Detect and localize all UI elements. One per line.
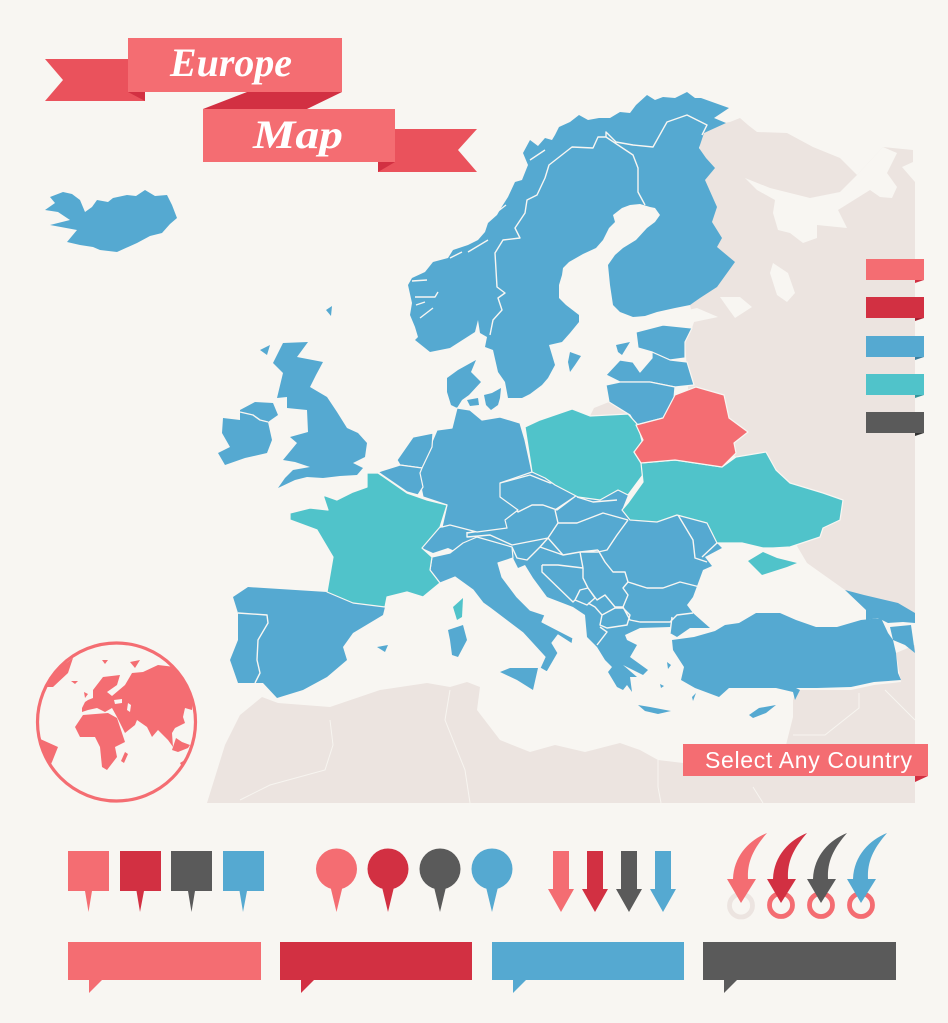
panel: Italy bbox=[430, 537, 573, 690]
panel: non-selectable surrounding land (Russia, North Africa, Middle East) bbox=[207, 118, 915, 803]
icon: Gotland bbox=[568, 352, 581, 372]
panel: Ireland bbox=[218, 402, 278, 465]
title ribbon: Europe bbox=[45, 38, 342, 109]
speech bar: red bbox=[280, 942, 472, 993]
panel: Netherlands and Belgium bbox=[378, 433, 433, 495]
panel: Germany bbox=[418, 408, 532, 532]
panel: Turkey and Caucasus bbox=[672, 590, 915, 700]
panel: selected country Belarus bbox=[634, 387, 748, 467]
panel: Mediterranean islands bbox=[326, 306, 776, 718]
speech bar: dark grey bbox=[703, 942, 896, 993]
panel: Denmark bbox=[447, 360, 501, 410]
legend: colour tabs bbox=[866, 259, 924, 436]
icons: curved arrows with rings bbox=[727, 833, 887, 917]
panel: Scandinavia (Norway, Sweden, Finland) bbox=[408, 92, 735, 398]
tag: select any country: Select Any Country bbox=[705, 747, 912, 773]
panel: United Kingdom bbox=[260, 342, 367, 488]
panel: Estonia, Latvia, Lithuania bbox=[606, 325, 694, 425]
speech bar: blue bbox=[492, 942, 684, 993]
icons: square pins bbox=[68, 851, 264, 912]
title ribbon: Map bbox=[203, 109, 477, 172]
icons: straight down arrows bbox=[548, 851, 676, 912]
title ribbon: Map: Map bbox=[252, 112, 343, 157]
panel: Iceland bbox=[45, 190, 177, 252]
icons: round pins bbox=[316, 848, 512, 912]
icon: globe bbox=[30, 643, 200, 801]
panel: Spain and Portugal bbox=[230, 587, 388, 698]
panel: highlighted countries in teal (France, Poland, Ukraine) bbox=[290, 409, 843, 620]
fjords of the Norwegian coast bbox=[412, 150, 545, 318]
speech bar: coral bbox=[68, 942, 261, 993]
title ribbon: Europe: Europe bbox=[169, 40, 292, 85]
panel: central and south-eastern Europe bbox=[422, 472, 722, 692]
tag: select any country bbox=[683, 744, 928, 782]
